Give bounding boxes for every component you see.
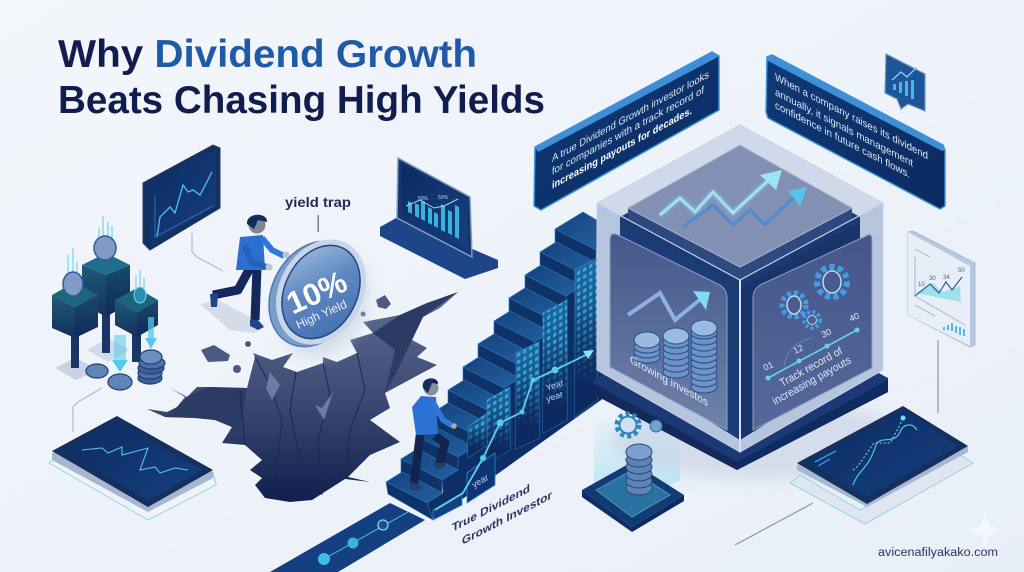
chart line [157,172,212,237]
dark rock faces [165,292,458,432]
callout: left explanation: A true Dividend Growth investor looks [552,69,709,165]
high yield coin [252,224,386,372]
central platform with coin stack [582,414,684,532]
legs [213,268,257,320]
chart labels [418,195,449,202]
callout: right explanation: confidence in future cash flows. [775,100,910,181]
card numbers: 30 [929,276,936,282]
glass body [597,125,883,452]
bottom-left tablet [49,416,216,520]
card numbers: 34 [943,275,950,281]
crevice lines [240,353,365,495]
callout: left explanation [534,52,719,210]
top-left monitor [143,145,220,250]
chart labels: 50% [438,195,449,201]
callout: left explanation: for companies with a track record of [552,84,705,178]
floating chart message icon [885,54,925,111]
year labels: year [470,472,490,490]
right face panel [753,235,872,430]
dark core [620,150,860,440]
timeline: 12 [792,343,805,356]
coins on ground [86,350,165,390]
watermark star [968,512,1002,548]
tablet chart line [82,447,188,473]
person climbing stairs [410,378,457,491]
card numbers: 50 [958,268,965,274]
side wall [427,240,615,520]
tablet chart lines [853,425,917,485]
top plate [628,145,852,280]
head [248,216,266,234]
true dividend growth investor label: Growth Investor [462,488,552,548]
chart labels: 50% [418,196,429,202]
data beams above coins [68,216,144,288]
yield trap label [285,194,351,232]
down arrows [112,317,157,372]
path band with milestones [270,503,425,572]
timeline: 30 [820,327,833,340]
step treads and risers [386,212,600,520]
website credit: avicenafilyakako.com [878,547,998,559]
left investment blocks with coins [52,216,165,390]
left block [52,282,98,338]
top-center monitor with base [380,158,498,279]
timeline: 01 [762,360,775,373]
callout: left explanation: increasing payouts for decades. [552,105,692,192]
callout: right explanation [766,55,945,209]
year labels: year [545,389,564,404]
center block [82,253,130,317]
connector lines [73,233,938,545]
true dividend growth investor label: True Dividend [452,481,530,535]
coin stack [626,444,652,495]
title: Beats Chasing High Yields [58,79,545,122]
card numbers: 10 [918,282,925,288]
callout: right explanation: When a company raises its dividend [775,72,928,162]
right block [115,288,158,337]
top arrows [660,177,772,215]
chasm crack [147,292,458,502]
year labels [470,378,565,490]
torso and arms [236,235,265,270]
title: Why Dividend Growth [58,33,477,76]
yield trap label: yield trap [285,194,351,210]
right floating chart card [908,231,975,347]
title [58,33,545,122]
year labels: Year [545,378,565,393]
track record label: Track record of [778,345,845,390]
timeline: 40 [848,311,861,324]
rising staircase [386,212,615,520]
coin stacks [634,320,717,393]
track record label: increasing payouts [771,354,854,408]
light beam behind platform [594,420,680,505]
coin labels: 10% [281,264,352,321]
growing investors label: Growing investos [630,353,708,409]
falling rocks [201,295,391,373]
growth line [435,350,594,510]
poles [71,310,141,368]
callout: right explanation: annually, it signals management [775,87,914,170]
bottom-right tablet [790,406,973,524]
glass shell edges [597,125,883,452]
bars [408,200,459,239]
person chasing the coin [200,215,290,333]
gear and coin [617,414,662,436]
timeline [762,311,861,380]
building columns [433,258,597,520]
card numbers [918,268,965,288]
high yield coin: High Yield [294,297,349,332]
panel arrow [628,293,702,320]
base [593,300,888,470]
gears [782,267,847,328]
glass cube [593,125,910,480]
left face panel [610,234,727,430]
coins on blocks [63,236,146,303]
